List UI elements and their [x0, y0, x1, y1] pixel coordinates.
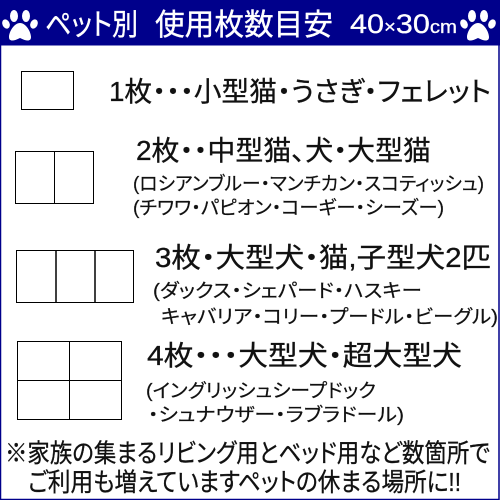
row 4: four sheets [18, 340, 462, 426]
icon: left paw [1, 10, 39, 40]
row 4 breeds line 1: (イングリッシュシープドック [146, 380, 376, 402]
row 4 breeds line 2: ・シュナウザー・ラブラドール) [148, 403, 404, 426]
row 1 label: 1枚・・・小型猫・うさぎ・フェレット [109, 76, 491, 107]
diagram: one sheet [22, 72, 74, 110]
title: sheet size: 40×30cm [350, 9, 457, 39]
title: pet usage guide: ペット別 [45, 9, 138, 42]
row 3: three sheets [16, 242, 498, 328]
footnote [5, 440, 490, 497]
header band [0, 0, 500, 46]
row 1: one sheet [22, 72, 491, 110]
row 3 label: 3枚・大型犬・猫,子型犬2匹 [155, 242, 491, 273]
icon: right paw [459, 10, 497, 40]
row 2: two sheets [16, 135, 484, 219]
row 3 breeds line 1: (ダックス・シェパード・ハスキー [153, 280, 422, 302]
title: sheet count guide: 使用枚数目安 [155, 9, 333, 42]
row 2 label: 2枚・・中型猫、犬・大型猫 [136, 135, 431, 166]
row 4 label: 4枚・・・大型犬・超大型犬 [147, 340, 462, 371]
row 2 breeds line 2: (チワワ・パピオン・コーギー・シーズー) [133, 197, 444, 219]
diagram: two sheets [16, 152, 94, 204]
row 2 breeds line 1: (ロシアンブルー・マンチカン・スコティッシュ) [133, 172, 484, 195]
diagram: three sheets [16, 250, 134, 302]
row 3 breeds line 2: キャバリア・コリー・プードル・ビーグル) [161, 306, 498, 328]
diagram: four sheets [18, 342, 122, 420]
